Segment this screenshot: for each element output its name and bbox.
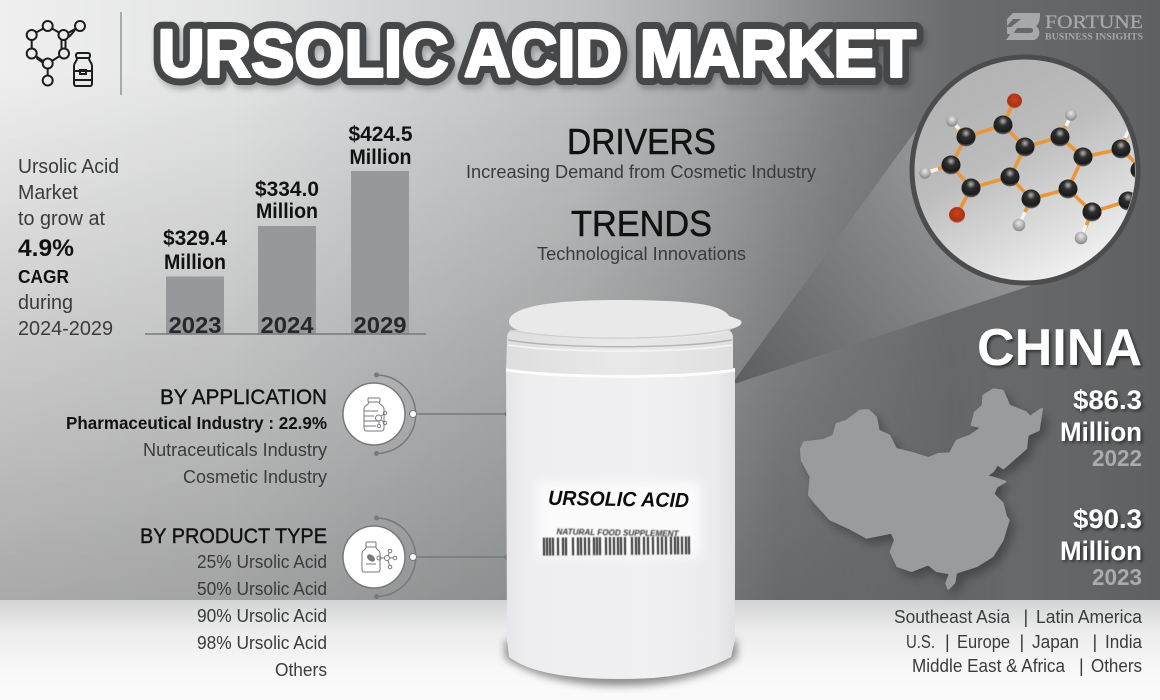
divider — [120, 12, 122, 95]
drivers: Increasing Demand from Cosmetic Industry — [466, 161, 817, 182]
by product type segment: 90% Ursolic Acid — [197, 605, 327, 626]
barcode — [544, 536, 689, 556]
map of China — [801, 389, 1042, 589]
by product type segment: 25% Ursolic Acid — [197, 551, 327, 572]
other regions: Southeast Asia — [894, 607, 1011, 627]
ursolic acid jar — [506, 300, 742, 679]
bar chart: 2024 — [260, 312, 314, 338]
market growth text: during — [18, 292, 73, 314]
bar chart: $329.4 — [163, 226, 227, 250]
bar chart — [145, 122, 426, 338]
market growth text — [18, 156, 119, 340]
by product type segment: 50% Ursolic Acid — [197, 578, 327, 599]
other regions: Japan — [1032, 632, 1079, 652]
China 2022 value: 2022 — [1092, 445, 1142, 471]
floor — [0, 600, 1160, 700]
bar chart: Million — [350, 145, 412, 169]
China 2023 value: 2023 — [1092, 564, 1142, 590]
bar chart: $424.5 — [348, 122, 413, 146]
by product type segment: Others — [275, 659, 327, 680]
other regions: India — [1105, 632, 1143, 652]
jar shadow — [505, 640, 737, 686]
beam from jar to lens — [731, 108, 1036, 385]
other regions: Middle East & Africa — [912, 656, 1066, 676]
other regions: | — [945, 632, 950, 652]
drivers: DRIVERS — [567, 121, 716, 162]
icon: molecule and bottle — [27, 21, 92, 86]
market growth text: Market — [18, 182, 78, 204]
icon: product type badge — [343, 516, 510, 599]
bar chart: Million — [256, 199, 318, 223]
trends: Technological Innovations — [537, 243, 746, 264]
China 2023 value — [1060, 504, 1142, 590]
by application segment: Pharmaceutical Industry : 22.9% — [66, 413, 327, 433]
market growth text: 4.9% — [18, 235, 74, 262]
other regions: | — [1024, 607, 1028, 627]
jar label text: URSOLIC ACID — [548, 487, 689, 512]
China 2022 value: Million — [1060, 417, 1142, 447]
China 2022 value: $86.3 — [1073, 385, 1142, 415]
other regions: | — [1020, 632, 1024, 652]
bar chart: 2029 — [354, 312, 406, 338]
other regions — [894, 607, 1143, 676]
bar chart: 2023 — [168, 312, 222, 338]
logo: Fortune Business Insights: BUSINESS INSIGHTS — [1045, 32, 1143, 42]
logo: Fortune Business Insights: FORTUNE — [1045, 12, 1143, 33]
drivers — [466, 121, 817, 182]
jar label text — [547, 487, 689, 539]
trends: TRENDS — [571, 203, 712, 244]
bar chart: $334.0 — [255, 177, 319, 201]
other regions: U.S. — [906, 632, 935, 652]
by application segment: Cosmetic Industry — [183, 466, 328, 487]
market growth text: CAGR — [18, 267, 69, 287]
region: China heading: CHINA — [977, 319, 1142, 377]
molecule lens — [912, 57, 1150, 283]
market growth text: Ursolic Acid — [18, 156, 119, 178]
China 2022 value — [1060, 385, 1142, 471]
market growth text: to grow at — [18, 208, 105, 230]
other regions: | — [1079, 656, 1084, 676]
jar label text: NATURAL FOOD SUPPLEMENT — [556, 527, 680, 539]
by application segment: BY APPLICATION — [160, 385, 327, 409]
other regions: Latin America — [1036, 607, 1143, 627]
China 2023 value: $90.3 — [1073, 504, 1142, 534]
by product type segment — [140, 524, 327, 680]
China 2023 value: Million — [1060, 536, 1142, 566]
other regions: Others — [1091, 656, 1142, 676]
title: URSOLIC ACID MARKET — [158, 16, 916, 92]
other regions: | — [1092, 632, 1097, 652]
title: URSOLIC ACID MARKET — [158, 16, 916, 92]
icon: application badge — [343, 372, 510, 456]
logo: Fortune Business Insights — [1006, 12, 1143, 42]
by application segment: Nutraceuticals Industry — [143, 439, 328, 460]
other regions: Europe — [957, 632, 1010, 652]
by product type segment: BY PRODUCT TYPE — [140, 524, 327, 548]
by product type segment: 98% Ursolic Acid — [197, 632, 327, 653]
bar chart: Million — [164, 250, 226, 274]
market growth text: 2024-2029 — [18, 318, 113, 340]
trends — [537, 203, 746, 264]
by application segment — [66, 385, 328, 487]
